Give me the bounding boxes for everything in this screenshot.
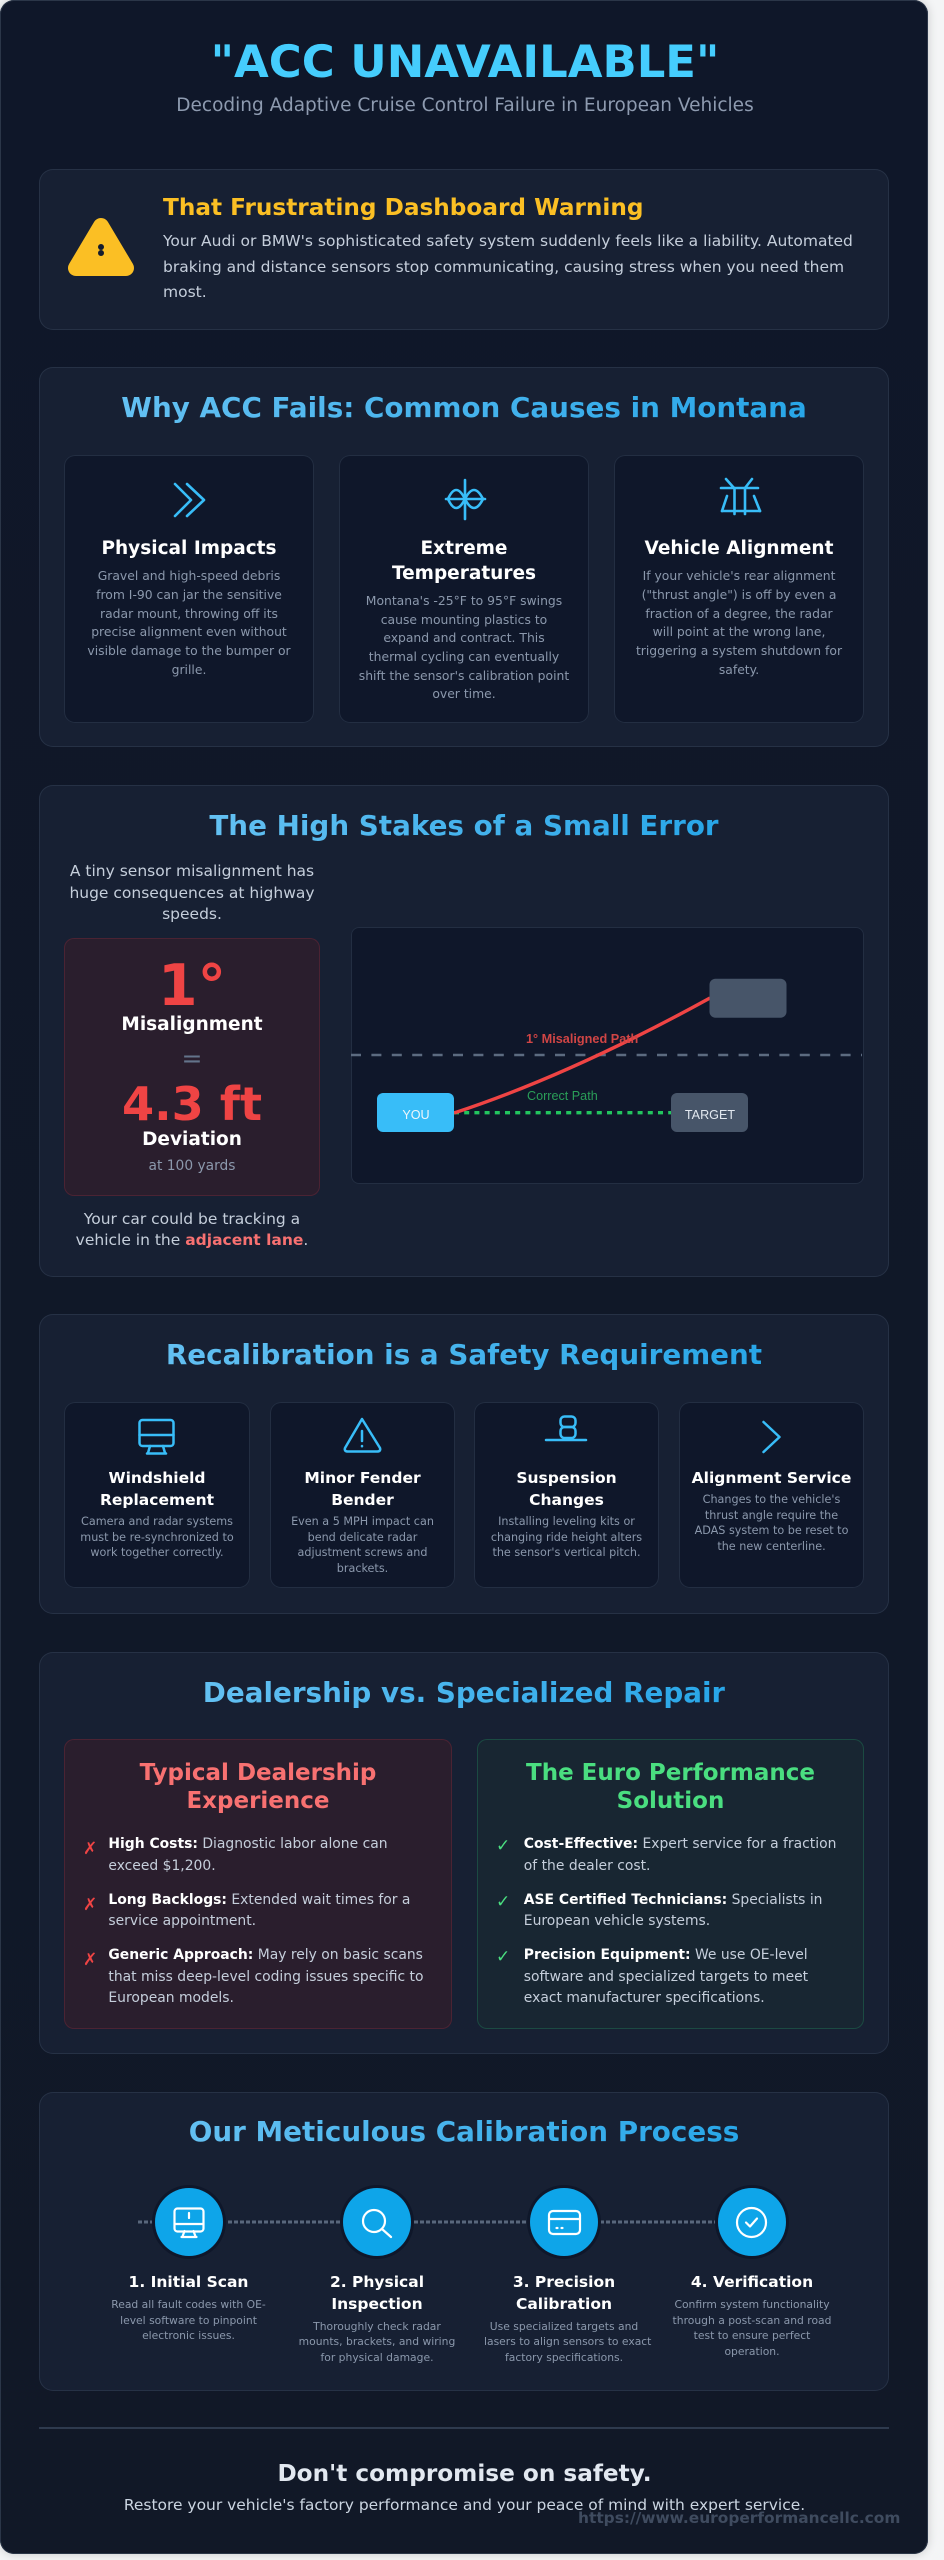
item: generic approach: European models. xyxy=(108,1990,234,2006)
item: precision equipment: ✓ xyxy=(496,1947,510,1967)
intro text: speeds. xyxy=(162,905,222,923)
intro text xyxy=(69,862,315,923)
step text: level software to pinpoint xyxy=(120,2314,257,2327)
card text: triggering a system shutdown for xyxy=(636,644,842,658)
card title: Vehicle Alignment xyxy=(645,538,833,558)
card text: from I-90 can jar the sensitive xyxy=(96,588,282,602)
misaligned path curve xyxy=(454,998,710,1113)
label: deviation: Deviation xyxy=(142,1129,242,1150)
subtitle: Decoding Adaptive Cruise Control Failure in European Vehicles xyxy=(176,95,754,116)
card title xyxy=(100,1469,214,1509)
warning text: most. xyxy=(163,283,207,301)
item: long backlogs: service appointment. xyxy=(108,1913,256,1929)
card text: Montana's -25°F to 95°F swings xyxy=(366,594,562,608)
step text: mounts, brackets, and wiring xyxy=(299,2335,455,2348)
step title xyxy=(330,2273,424,2313)
card title: Suspension xyxy=(516,1469,617,1487)
conclusion text: Your car could be tracking a xyxy=(84,1210,300,1228)
warning text: Your Audi or BMW's sophisticated safety system suddenly feels like a liability. Automated xyxy=(163,232,853,250)
card: alignment service xyxy=(679,1402,864,1588)
step title xyxy=(513,2273,615,2313)
item: precision equipment: exact manufacturer specifications. xyxy=(524,1990,765,2006)
label: at 100 yards: at 100 yards xyxy=(149,1158,235,1174)
correct path line xyxy=(454,1111,671,1114)
card: suspension xyxy=(474,1402,659,1588)
card text: expand and contract. This xyxy=(383,631,545,645)
lane divider xyxy=(351,1054,862,1056)
website url: https://www.europerformancellc.com xyxy=(578,2509,900,2527)
step title: 4. Verification xyxy=(691,2273,813,2291)
item: generic approach: ✗ xyxy=(83,1950,97,1970)
item: generic approach: that miss deep-level coding issues specific to xyxy=(108,1969,424,1985)
card text xyxy=(291,1515,434,1575)
car: adjacent lane xyxy=(710,979,786,1018)
card title: Windshield xyxy=(108,1469,206,1487)
step text: operation. xyxy=(724,2345,780,2358)
step 1 xyxy=(111,2185,266,2342)
stat: 4.3 ft: 4.3 ft xyxy=(122,1077,262,1131)
card text: thermal cycling can eventually xyxy=(369,650,559,664)
card text: changing ride height alters xyxy=(491,1531,642,1544)
conclusion text xyxy=(76,1210,308,1249)
card title xyxy=(304,1469,421,1509)
icon: verification check xyxy=(718,2188,786,2256)
step text: for physical damage. xyxy=(320,2351,434,2364)
card: physical impacts xyxy=(64,454,314,722)
column title: The Euro Performance xyxy=(526,1760,815,1786)
warning heading: That Frustrating Dashboard Warning xyxy=(163,194,643,221)
item: high costs xyxy=(83,1836,388,1874)
label: misalignment: Misalignment xyxy=(121,1014,263,1035)
card text: Changes to the vehicle's xyxy=(703,1493,840,1506)
column: dealership xyxy=(64,1739,452,2029)
card text: cause mounting plastics to xyxy=(381,613,547,627)
heading: The High Stakes of a Small Error xyxy=(209,809,719,842)
step text: Thoroughly check radar xyxy=(313,2320,441,2333)
card title: Changes xyxy=(529,1491,604,1509)
step text: through a post-scan and road xyxy=(673,2314,831,2327)
label: misaligned path: 1° Misaligned Path xyxy=(526,1032,638,1046)
step title: 2. Physical xyxy=(330,2273,424,2291)
card text: If your vehicle's rear alignment xyxy=(643,569,835,583)
step text xyxy=(484,2320,652,2364)
card text xyxy=(636,569,842,677)
heading: Our Meticulous Calibration Process xyxy=(189,2115,739,2148)
column title: Typical Dealership xyxy=(140,1760,376,1786)
item: precision equipment: software and specialized targets to meet xyxy=(524,1969,808,1985)
item: ase certified: ASE Certified Technicians: Specialists in xyxy=(524,1892,822,1908)
item: precision equipment xyxy=(496,1947,808,2006)
item: ase certified: European vehicle systems. xyxy=(524,1913,710,1929)
card text: grille. xyxy=(172,663,206,677)
card text: safety. xyxy=(719,663,759,677)
icon: chevron xyxy=(762,1420,781,1454)
card title: Physical Impacts xyxy=(101,538,277,558)
stat: 1 degree: 1° xyxy=(158,952,226,1018)
item: precision equipment: Precision Equipment: We use OE-level xyxy=(524,1947,808,1963)
icon: monitor xyxy=(138,1418,175,1455)
conclusion text: vehicle in the adjacent lane. xyxy=(76,1231,308,1249)
item: generic approach: Generic Approach: May rely on basic scans xyxy=(108,1947,423,1963)
panel: high stakes xyxy=(39,785,889,1277)
icon: suspension stack xyxy=(544,1415,588,1442)
step text xyxy=(111,2298,266,2342)
heading: Why ACC Fails: Common Causes in Montana xyxy=(121,391,807,424)
card text: adjustment screws and xyxy=(298,1546,427,1559)
car: you xyxy=(377,1093,454,1132)
footer heading: Don't compromise on safety. xyxy=(277,2460,652,2487)
icon: calibration card xyxy=(530,2188,598,2256)
step text: lasers to align sensors to exact xyxy=(484,2335,651,2348)
card text xyxy=(359,594,569,701)
footer text: Restore your vehicle's factory performance and your peace of mind with expert service. xyxy=(124,2496,805,2514)
diagram: misaligned path xyxy=(351,927,864,1184)
card text: shift the sensor's calibration point xyxy=(359,669,569,683)
panel: dealership comparison xyxy=(39,1652,889,2054)
car: target xyxy=(671,1093,748,1132)
step title: Calibration xyxy=(516,2295,612,2313)
icon: warning outline xyxy=(344,1418,382,1453)
step title: 3. Precision xyxy=(513,2273,615,2291)
card text: ("thrust angle") is off by even a xyxy=(642,588,836,602)
card text: over time. xyxy=(432,687,496,701)
card text: visible damage to the bumper or xyxy=(87,644,291,658)
step 3 xyxy=(484,2185,652,2364)
item: cost effective xyxy=(496,1836,836,1874)
step text: Confirm system functionality xyxy=(674,2298,830,2311)
item: high costs: ✗ xyxy=(83,1839,97,1859)
item: ase certified xyxy=(496,1892,822,1929)
card: fender bender xyxy=(270,1402,455,1588)
card text: Even a 5 MPH impact can xyxy=(291,1515,434,1528)
card title: Minor Fender xyxy=(304,1469,421,1487)
step text xyxy=(299,2320,455,2364)
card text: Installing leveling kits or xyxy=(498,1515,635,1528)
card title: Temperatures xyxy=(392,562,536,584)
card: extreme temperatures xyxy=(339,454,589,722)
warning text: braking and distance sensors stop communicating, causing stress when you need them xyxy=(163,258,844,276)
intro text: huge consequences at highway xyxy=(69,884,315,902)
card title: Bender xyxy=(331,1491,394,1509)
item: long backlogs xyxy=(83,1892,410,1929)
step title: Inspection xyxy=(331,2295,423,2313)
warning text xyxy=(163,232,853,301)
item: generic approach xyxy=(83,1947,424,2006)
card title: Alignment Service xyxy=(692,1469,851,1487)
panel: common causes xyxy=(39,367,889,747)
card text: ADAS system to be reset to xyxy=(695,1524,848,1537)
card title xyxy=(516,1469,617,1509)
card text: must be re-synchronized to xyxy=(80,1531,234,1544)
step title: 1. Initial Scan xyxy=(129,2273,248,2291)
card text: the new centerline. xyxy=(717,1540,826,1553)
column title: Experience xyxy=(186,1788,330,1814)
card text: Gravel and high-speed debris xyxy=(98,569,280,583)
step text: factory specifications. xyxy=(505,2351,623,2364)
item: high costs: High Costs: Diagnostic labor alone can xyxy=(108,1836,388,1852)
card text: thrust angle require the xyxy=(705,1509,838,1522)
step text: electronic issues. xyxy=(142,2329,235,2342)
icon: warning triangle xyxy=(68,218,134,276)
intro text: A tiny sensor misalignment has xyxy=(70,862,314,880)
card: windshield xyxy=(64,1402,250,1588)
panel: calibration process xyxy=(39,2092,889,2391)
card text xyxy=(491,1515,642,1559)
item: ase certified: ✓ xyxy=(496,1892,510,1912)
panel: recalibration xyxy=(39,1314,889,1614)
icon: magnifier xyxy=(343,2188,411,2256)
card title: Extreme xyxy=(421,538,507,558)
card text: will point at the wrong lane, xyxy=(653,625,825,639)
card text xyxy=(87,569,291,677)
card text: brackets. xyxy=(337,1562,388,1575)
process connector xyxy=(138,2220,716,2224)
step 2 xyxy=(299,2185,455,2364)
column title xyxy=(526,1760,815,1814)
card text: Camera and radar systems xyxy=(81,1515,233,1528)
title: "ACC UNAVAILABLE" xyxy=(211,35,719,88)
icon: scan monitor xyxy=(154,2188,222,2256)
step text xyxy=(672,2297,832,2359)
car: you: YOU xyxy=(402,1108,430,1122)
item: high costs: exceed $1,200. xyxy=(108,1858,216,1874)
stat box: misalignment xyxy=(64,938,320,1196)
item: cost effective: Cost-Effective: Expert service for a fraction xyxy=(524,1836,836,1852)
card text: work together correctly. xyxy=(90,1546,224,1559)
item: cost effective: of the dealer cost. xyxy=(524,1858,650,1874)
card title: Replacement xyxy=(100,1491,214,1509)
card text: the sensor's vertical pitch. xyxy=(492,1546,641,1559)
label: correct path: Correct Path xyxy=(527,1089,598,1103)
card text: radar mount, throwing off its xyxy=(100,607,278,621)
card text: bend delicate radar xyxy=(308,1531,417,1544)
card text xyxy=(80,1515,234,1559)
panel: dashboard warning xyxy=(39,169,889,330)
icon: double chevron xyxy=(174,482,206,518)
icon: thermal sensor xyxy=(444,478,486,520)
column title xyxy=(140,1760,376,1814)
item: long backlogs: Long Backlogs: Extended wait times for a xyxy=(108,1892,410,1908)
step 4 xyxy=(672,2185,831,2358)
icon: alignment rig xyxy=(720,478,762,516)
step text: test to ensure perfect xyxy=(694,2329,810,2342)
car: target: TARGET xyxy=(685,1108,735,1122)
column: euro performance xyxy=(477,1739,864,2029)
card text: precise alignment even without xyxy=(91,625,287,639)
equals sign: = xyxy=(182,1044,202,1073)
column title: Solution xyxy=(617,1788,724,1814)
item: cost effective: ✓ xyxy=(496,1836,510,1856)
item: long backlogs: ✗ xyxy=(83,1894,97,1914)
step text: Use specialized targets and xyxy=(490,2320,638,2333)
step text: Read all fault codes with OE- xyxy=(111,2298,266,2311)
heading: Dealership vs. Specialized Repair xyxy=(203,1676,725,1709)
card: vehicle alignment xyxy=(614,454,864,722)
card text: fraction of a degree, the radar xyxy=(645,607,833,621)
card title xyxy=(392,538,536,584)
card text xyxy=(694,1493,848,1553)
heading: Recalibration is a Safety Requirement xyxy=(166,1338,762,1371)
